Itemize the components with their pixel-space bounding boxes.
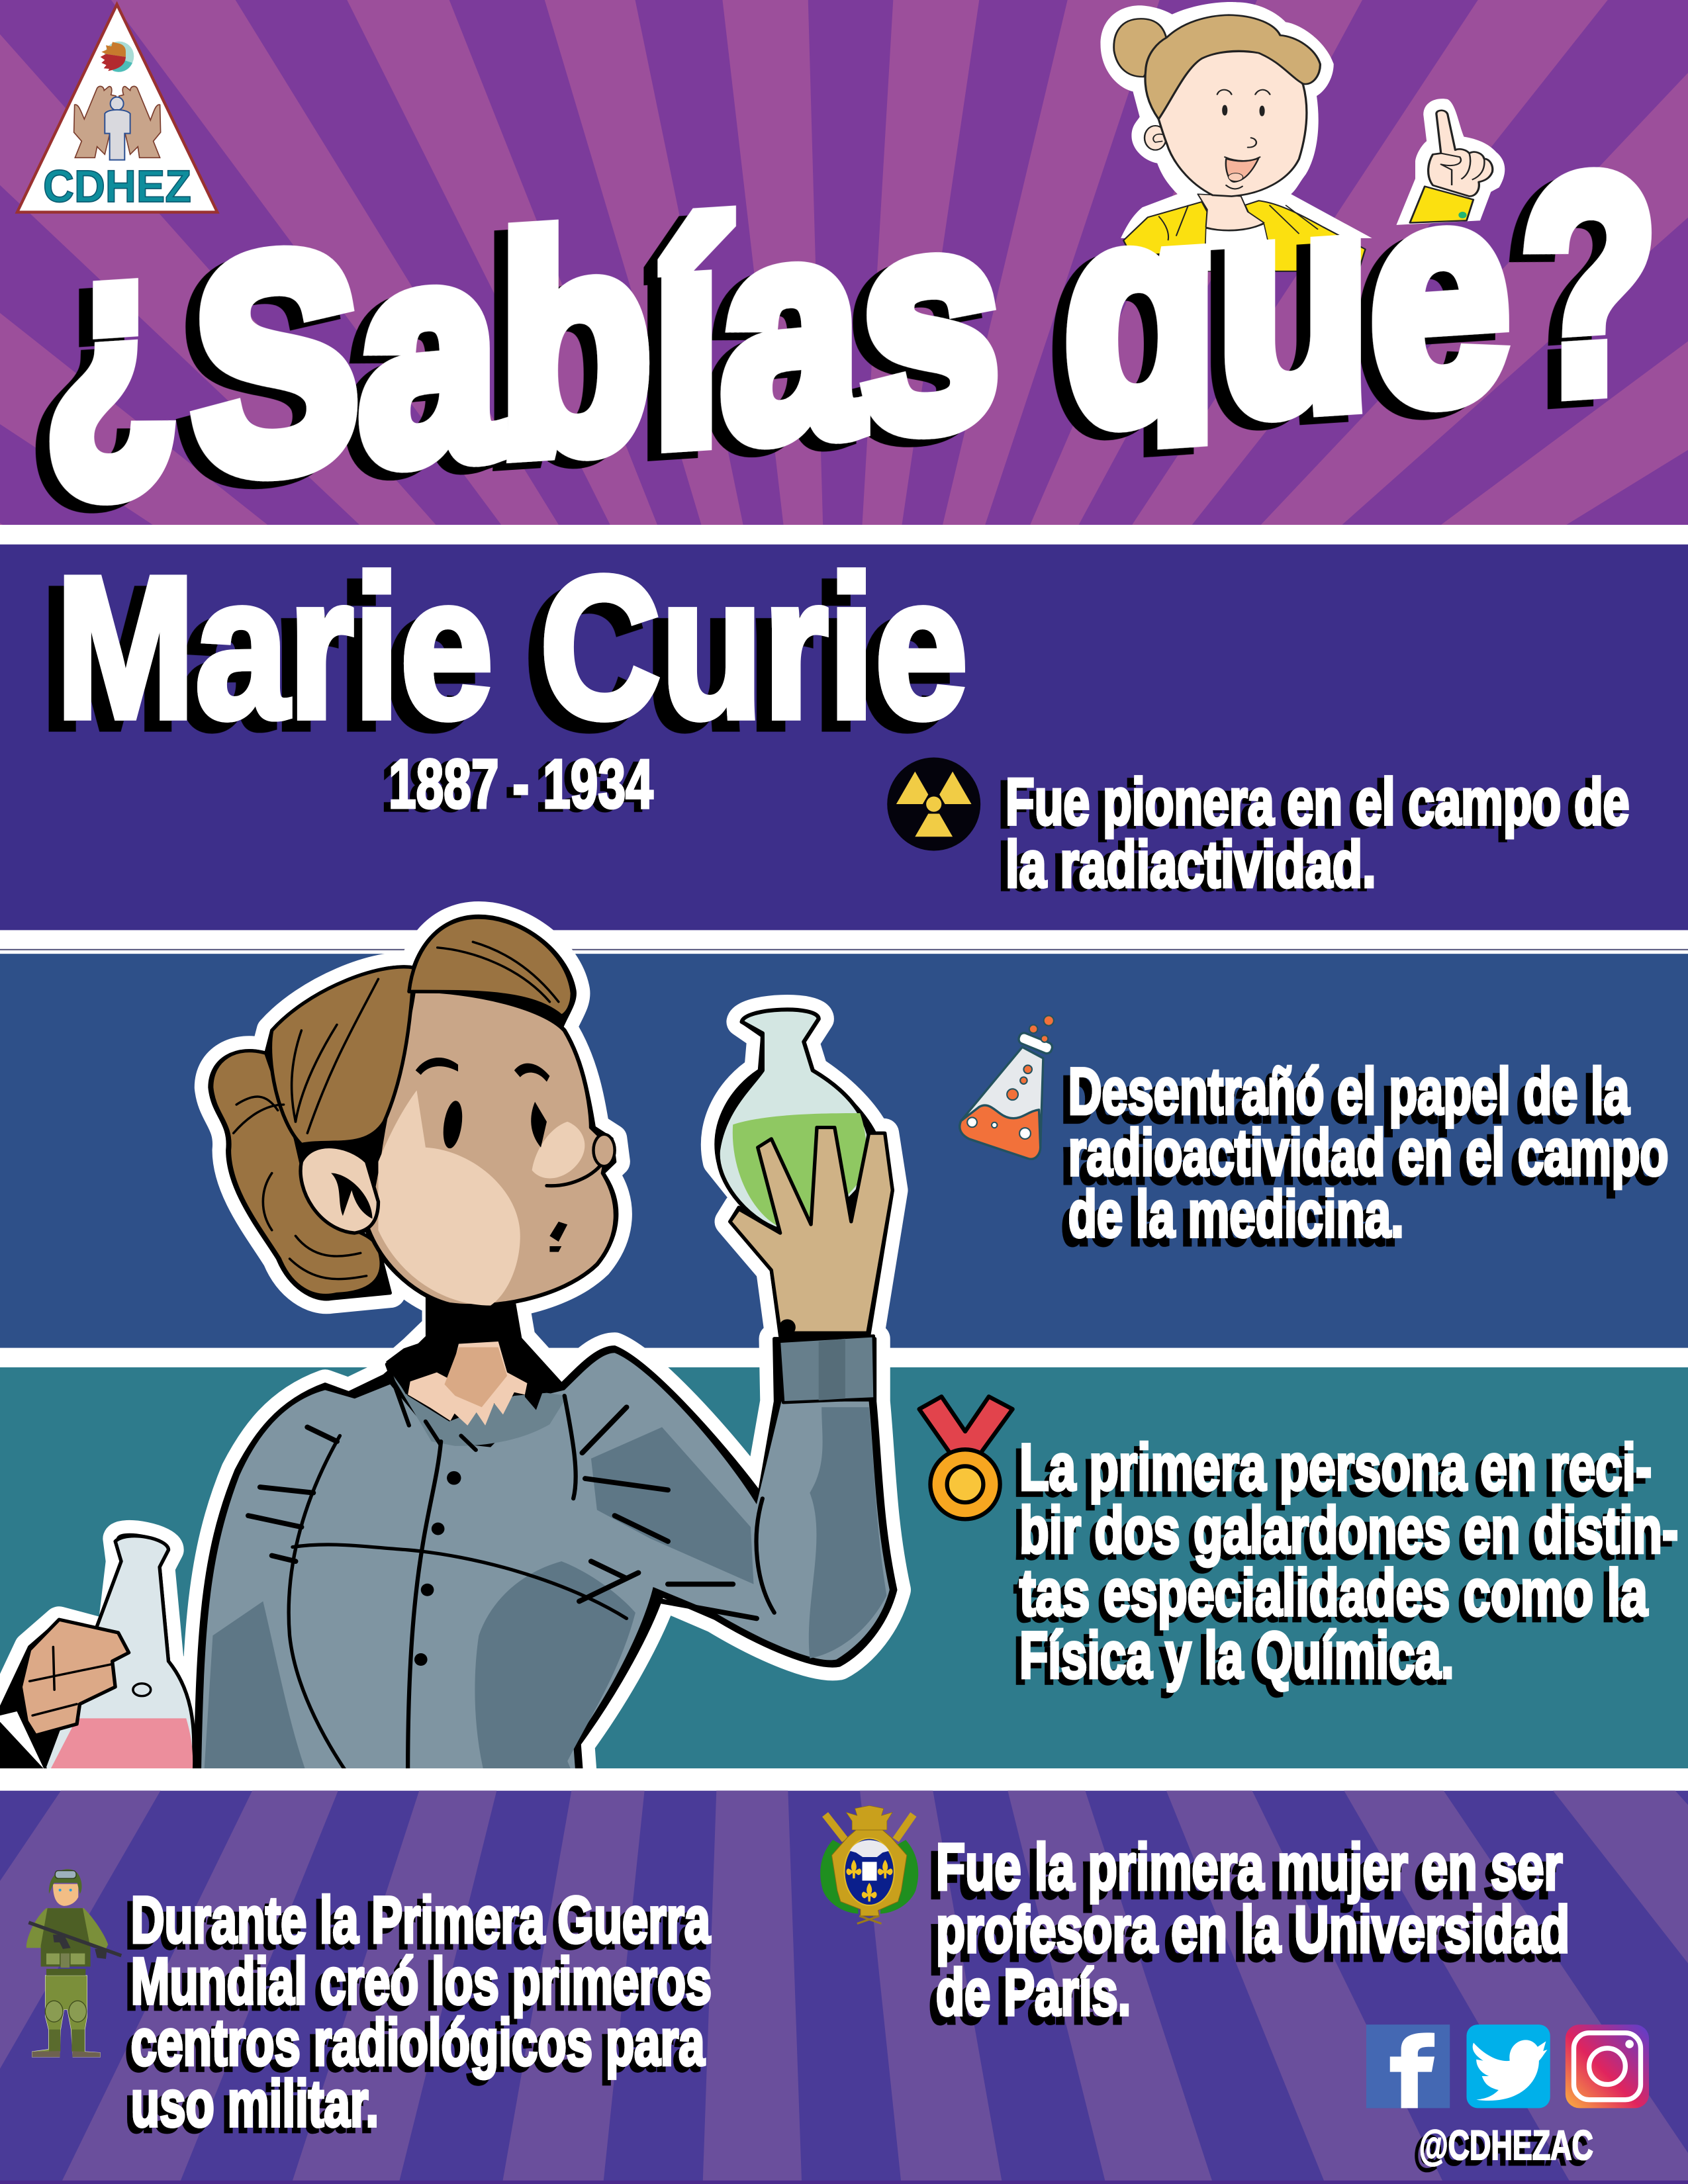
icon: university crest bbox=[820, 1805, 918, 1924]
dates: 1887 - 1934 bbox=[389, 745, 653, 823]
eyes and brows bbox=[416, 1058, 567, 1252]
neck shadow bbox=[425, 1297, 437, 1337]
top banner background with rays bbox=[0, 0, 1688, 525]
illustration: Marie Curie bbox=[0, 916, 896, 1784]
fact: war: Mundial creó los primeros bbox=[131, 1944, 712, 2018]
icon: instagram bbox=[1566, 2025, 1649, 2108]
soldier arms bbox=[26, 1908, 108, 1954]
top hair bbox=[409, 917, 572, 1016]
character: girl pointing up bbox=[1100, 2, 1505, 271]
icon: chemistry flask bbox=[960, 1016, 1054, 1159]
face bbox=[367, 991, 616, 1306]
cuff bbox=[779, 1336, 875, 1402]
soldier rifle bbox=[28, 1923, 121, 1956]
main title bbox=[35, 167, 1652, 514]
soldier boots bbox=[49, 2030, 85, 2052]
left hand bbox=[21, 1619, 129, 1735]
band: prize panel bbox=[0, 1367, 1688, 1768]
soldier vest bbox=[41, 1908, 91, 1967]
fact: medicine bbox=[1068, 1054, 1669, 1250]
icon: facebook bbox=[1366, 2025, 1450, 2108]
logo figure bbox=[105, 97, 130, 160]
hair strands bbox=[234, 942, 559, 1279]
ear bbox=[301, 1147, 378, 1233]
crest fasces bbox=[825, 1815, 914, 1840]
icon: soldier bbox=[26, 1869, 121, 2057]
bottom panel background with rays bbox=[0, 1791, 1688, 2184]
ruffle black right bbox=[498, 1340, 545, 1410]
main title: ¿ bbox=[44, 174, 178, 512]
band: medicine panel bbox=[0, 954, 1688, 1348]
dress shading bbox=[204, 1407, 886, 1776]
icon: twitter bbox=[1466, 2025, 1550, 2108]
dress lines bbox=[248, 1365, 774, 1776]
icon: radiation bbox=[887, 758, 980, 850]
logo name: CDHEZ bbox=[43, 161, 191, 212]
fact: prizes bbox=[1019, 1430, 1678, 1692]
collar band bbox=[393, 1375, 567, 1446]
social handle: @CDHEZAC bbox=[1419, 2122, 1593, 2169]
fact: professor bbox=[936, 1830, 1570, 2028]
character bun bbox=[1114, 19, 1166, 77]
crest shield bbox=[845, 1839, 894, 1905]
ruffle black left bbox=[386, 1339, 459, 1394]
right hand bbox=[730, 1128, 892, 1333]
band: name panel bbox=[0, 545, 1688, 930]
fact: war: Durante la Primera Guerra bbox=[131, 1883, 711, 1956]
buttons bbox=[414, 1471, 461, 1666]
character sticker outline bbox=[1100, 2, 1372, 238]
divider line bbox=[0, 949, 1688, 950]
side hair bbox=[270, 967, 414, 1144]
character pointing hand bbox=[1429, 111, 1493, 197]
soldier head bbox=[53, 1884, 78, 1906]
crest frame bbox=[832, 1830, 907, 1916]
band: white separators bbox=[0, 525, 1688, 545]
character jacket bbox=[1123, 201, 1365, 271]
face highlight bbox=[378, 1090, 520, 1306]
character neck bbox=[1197, 194, 1264, 230]
fact: war: uso militar. bbox=[131, 2067, 379, 2140]
crest crown bbox=[846, 1805, 892, 1830]
crest fronds bbox=[820, 1840, 918, 1914]
logo hands bbox=[74, 86, 161, 158]
fact: pioneer: la radiactividad. bbox=[1006, 827, 1376, 901]
hand sticker outline bbox=[1396, 99, 1505, 225]
character face bbox=[1158, 52, 1307, 197]
fact: medicine: de la medicina. bbox=[1068, 1177, 1404, 1250]
nose bbox=[532, 1122, 585, 1178]
green flask bbox=[718, 1009, 872, 1230]
soldier knees bbox=[45, 2001, 87, 2022]
name heading: Marie Curie bbox=[56, 535, 968, 760]
figure black outline bbox=[0, 916, 896, 1784]
fact: professor: de París. bbox=[936, 1955, 1131, 2028]
character sleeve bbox=[1410, 187, 1474, 223]
fact: war bbox=[131, 1883, 712, 2140]
soldier legs bbox=[32, 1976, 101, 2057]
back hair bun bbox=[212, 1051, 381, 1295]
dress bbox=[201, 1353, 890, 1784]
crest fleurs bbox=[847, 1860, 893, 1901]
character features bbox=[1217, 90, 1270, 189]
fact: pioneer bbox=[1006, 765, 1630, 901]
figure sticker outline bbox=[0, 916, 896, 1784]
main title: Sabías bbox=[192, 146, 1000, 539]
character ear bbox=[1145, 126, 1166, 150]
logo: CDHEZ triangle bbox=[17, 5, 217, 212]
character hair bbox=[1145, 15, 1320, 119]
main title: que bbox=[1064, 118, 1510, 490]
icon: medal bbox=[919, 1396, 1013, 1519]
logo sun bbox=[101, 42, 134, 72]
pink flask bbox=[42, 1536, 194, 1776]
neck skin bbox=[408, 1342, 527, 1426]
fact: prizes: Física y la Química. bbox=[1019, 1618, 1454, 1692]
fact: war: centros radiológicos para bbox=[131, 2005, 705, 2079]
character shirt bbox=[1205, 224, 1275, 271]
